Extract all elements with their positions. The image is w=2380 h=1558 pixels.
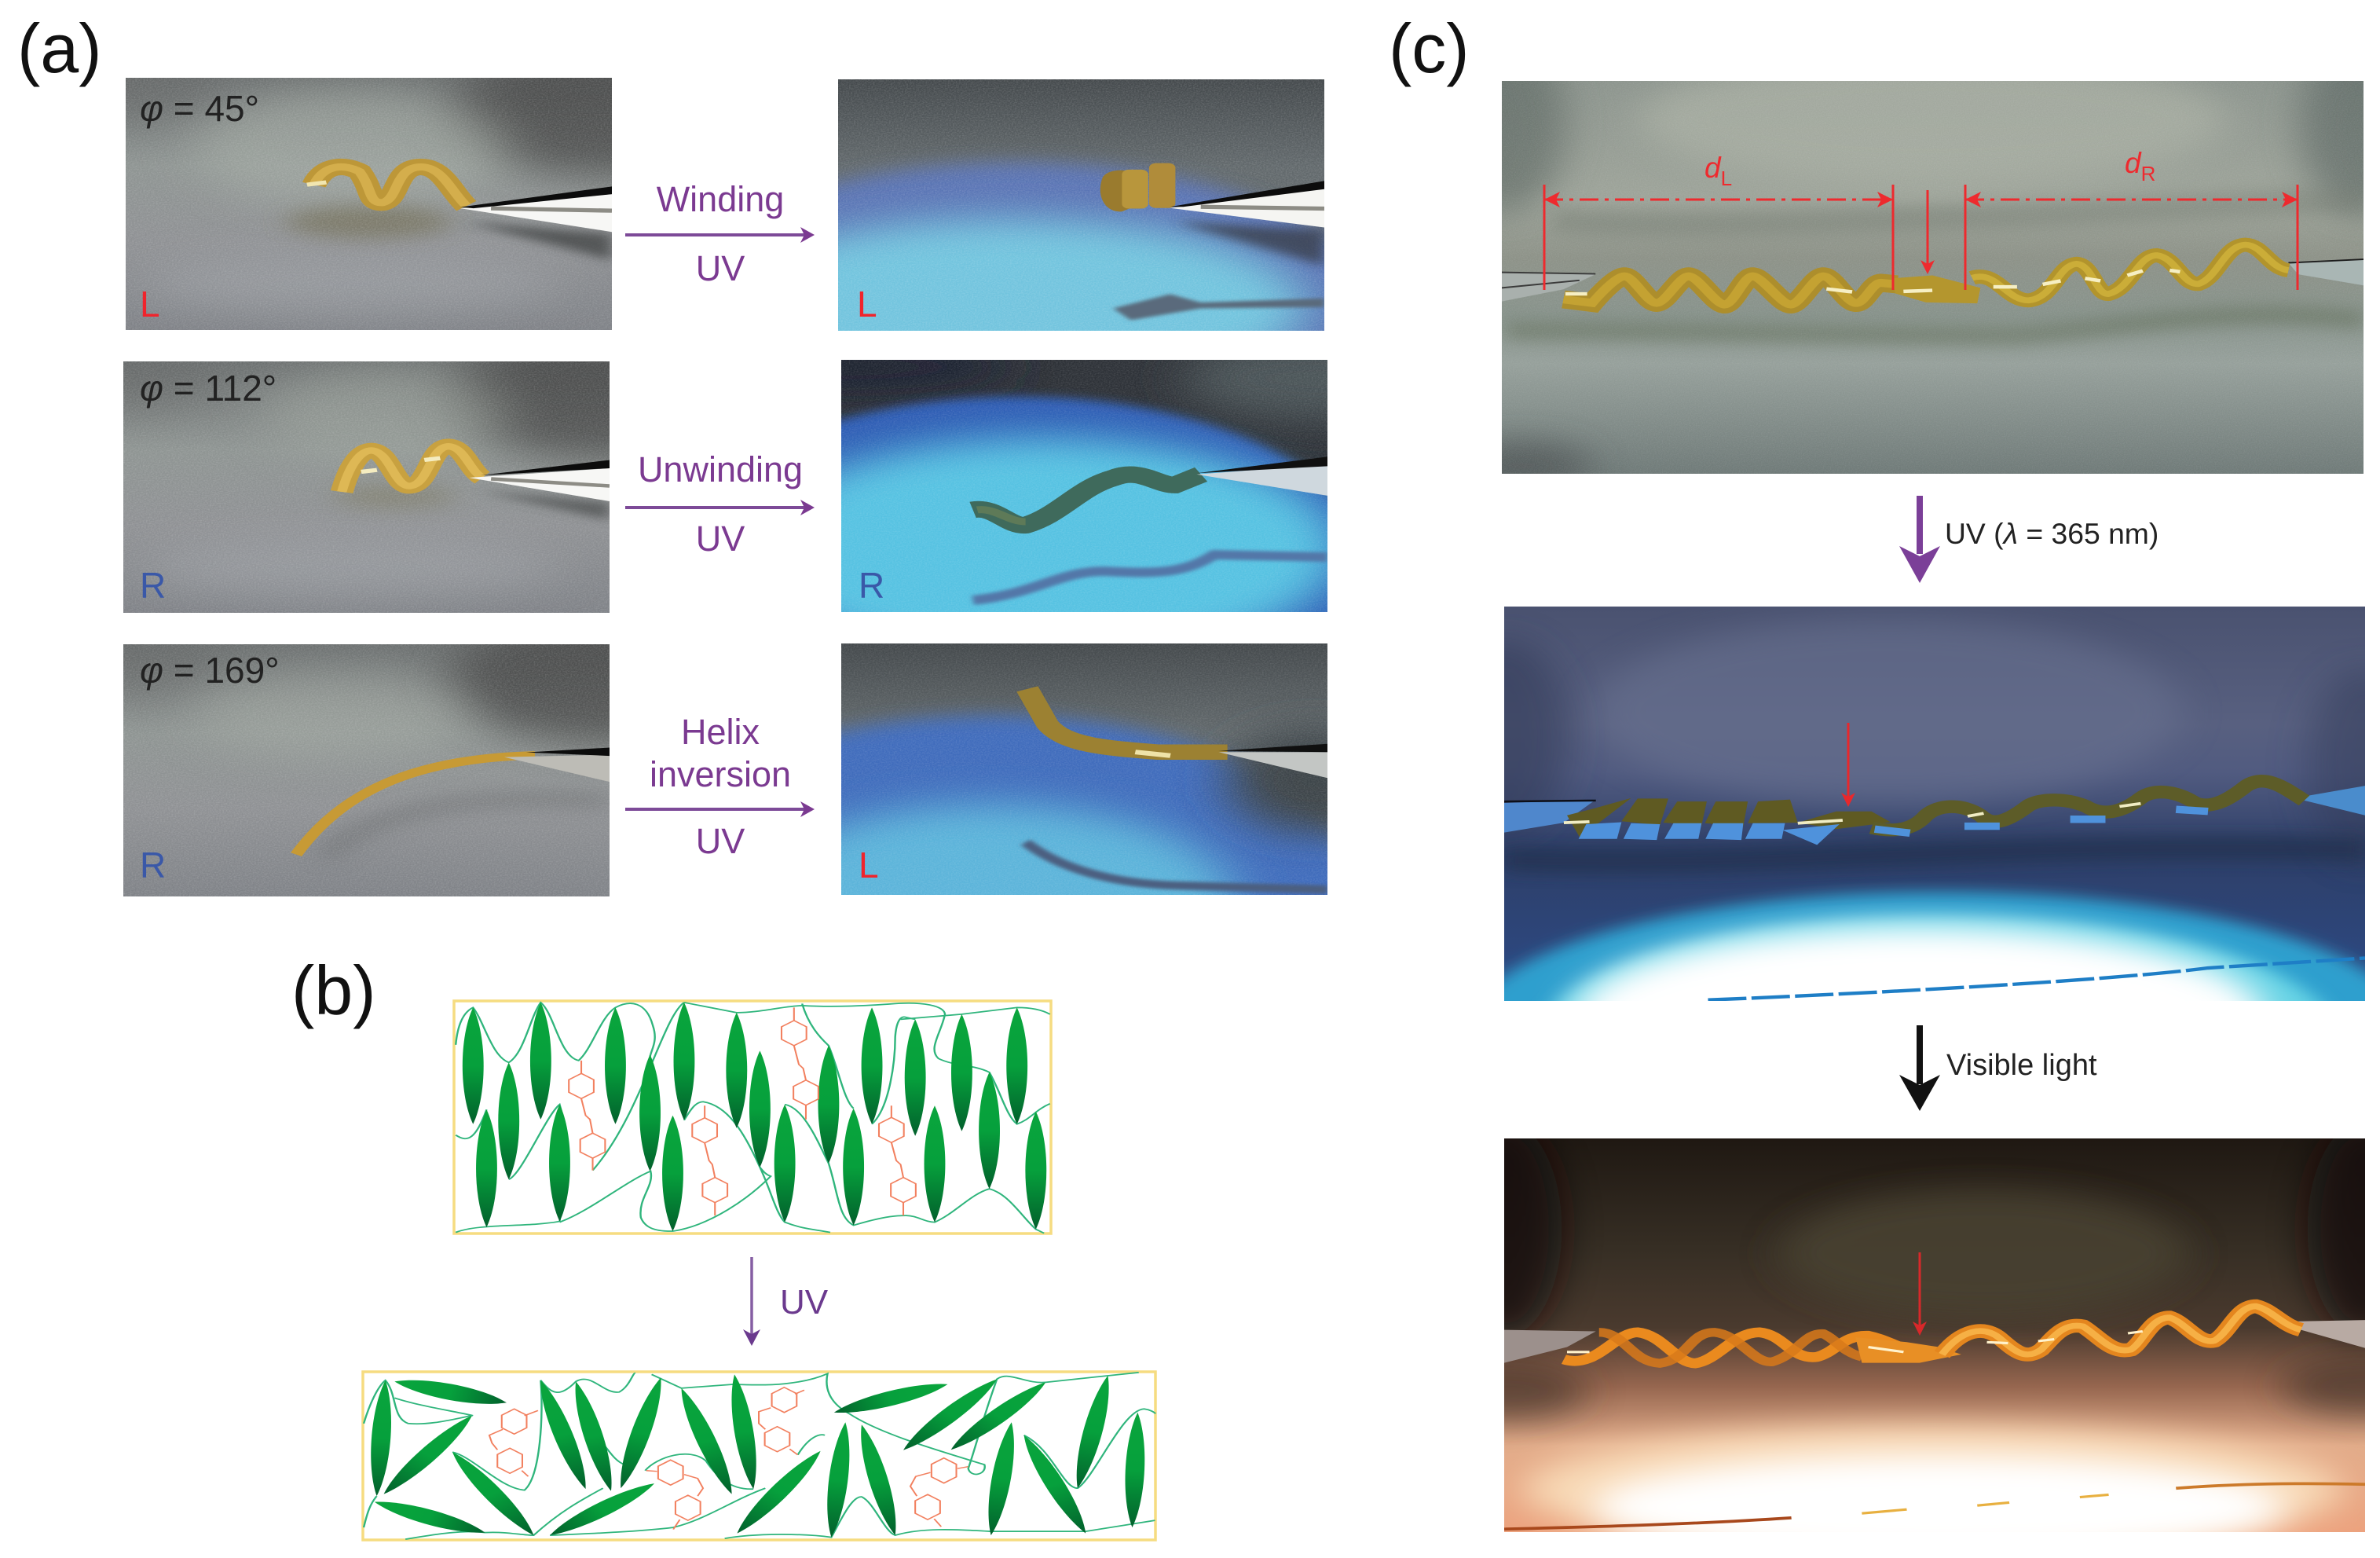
arrow with text: visible light — [1899, 1025, 2097, 1111]
panel a photo: 45 degree helix under UV — [640, 79, 1393, 499]
label: phi 45: φ = 45° — [140, 88, 259, 129]
panel c photo: initial heterochiral ribbon with annotations — [1437, 35, 2380, 491]
panel c photo: ribbon under UV — [1440, 607, 2380, 1172]
annotation: red arrow — [1841, 723, 1855, 807]
arrow: UV between schematics — [743, 1257, 829, 1346]
arrow with text: winding: Winding — [657, 179, 784, 219]
arrow with text: unwinding — [625, 449, 815, 559]
panel label: (c): (c) — [1389, 9, 1470, 87]
arrow with text: helix inversion — [625, 712, 815, 861]
liquid crystal rods — [368, 1373, 1147, 1541]
handedness label: row 2 left R: R — [140, 565, 166, 606]
label: d R: d — [2125, 147, 2142, 179]
panel label: (a): (a) — [17, 9, 102, 87]
label: d L: L — [1721, 167, 1732, 190]
schematic: disordered liquid crystal network after UV — [363, 1372, 1155, 1541]
arrow with text: unwinding: UV — [696, 519, 745, 559]
panel a photo: 112 degree helix under UV — [666, 337, 1464, 739]
annotation: red arrowheads — [1544, 192, 2298, 274]
azobenzene molecules — [489, 1388, 968, 1530]
panel a photo: 169 degree ribbon before UV — [61, 615, 781, 896]
annotation: red distance markers — [1544, 185, 2298, 290]
annotation: red arrow — [1913, 1252, 1927, 1336]
chains — [364, 1373, 1155, 1539]
handedness label: row 3 left R: R — [140, 845, 166, 885]
panel c photo: ribbon recovered under visible light — [1421, 1120, 2380, 1558]
arrow: UV between schematics: UV — [780, 1283, 829, 1322]
arrow with text: winding — [625, 179, 815, 288]
label: phi 169: φ = 169° — [140, 650, 280, 691]
arrow with text: helix inversion: UV — [696, 821, 745, 861]
azobenzene molecules — [569, 1007, 916, 1215]
arrow with text: helix inversion: Helix — [681, 712, 760, 752]
panel label: (b): (b) — [291, 951, 376, 1029]
chains — [456, 1003, 1050, 1234]
arrow with text: visible light: Visible light — [1946, 1049, 2097, 1082]
liquid crystal rods — [463, 1003, 1046, 1231]
arrow with text: UV 365 nm: UV (λ = 365 nm) — [1945, 517, 2158, 550]
handedness label: row 2 right R: R — [859, 565, 884, 606]
label: d R: R — [2141, 162, 2155, 185]
panel a photo: 169 degree ribbon under UV — [622, 643, 1403, 1081]
schematic: ordered liquid crystal network before UV — [454, 1001, 1051, 1234]
arrow with text: helix inversion: inversion — [650, 754, 791, 794]
arrow with text: winding: UV — [696, 248, 745, 288]
handedness label: row 1 left L: L — [140, 284, 160, 324]
arrow with text: UV 365 nm — [1899, 496, 2158, 583]
handedness label: row 3 right L: L — [859, 845, 879, 885]
label: d L: d — [1704, 152, 1722, 184]
handedness label: row 1 right L: L — [857, 284, 877, 324]
label: phi 112: φ = 112° — [140, 368, 276, 409]
panel a photo: 112 degree right-handed helix before UV — [61, 332, 781, 613]
arrow with text: unwinding: Unwinding — [638, 449, 803, 489]
panel a photo: 45 degree left-handed helix before UV — [62, 48, 780, 330]
